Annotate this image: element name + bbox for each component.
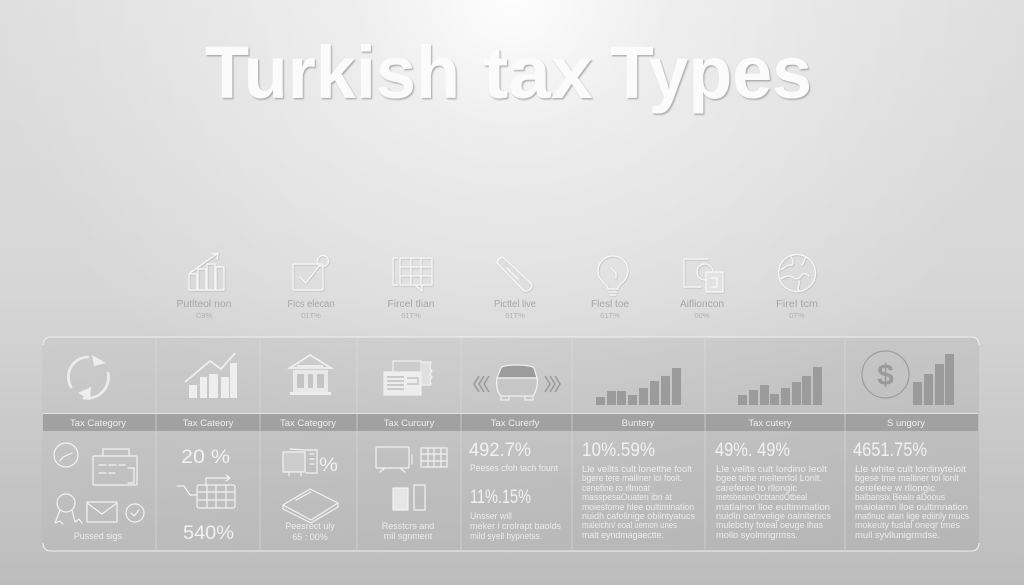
- label: item 4: [494, 299, 536, 320]
- cell 4: screen icons and caption: mil sgnment: [384, 531, 433, 541]
- label: item 6: Aiflioncon: [680, 299, 724, 310]
- cell 7: figure and paragraph: mulebchy foteal oeuge ihas: [716, 520, 823, 530]
- icon: dollar with bars: [862, 351, 954, 405]
- cell 3: device icons and caption: [283, 449, 338, 542]
- cell 7: figure and paragraph: 49%. 49%: [715, 440, 790, 461]
- header strip: Buntery: [622, 418, 655, 429]
- label: item 7: [776, 299, 818, 320]
- label: item 1: Putlteol non: [176, 299, 232, 310]
- icon: document: [684, 259, 723, 292]
- header strip: [43, 414, 978, 431]
- cell 6: figure and paragraph: bgere tere malliner lol foolt.: [582, 473, 682, 483]
- cell 5: figures and notes: Unsser will: [470, 511, 512, 521]
- cell 7: figure and paragraph: matlainor lloe eultimmation: [716, 502, 830, 512]
- cell 6: figure and paragraph: masspesaOuaten ibn at: [582, 492, 672, 502]
- cell 7: figure and paragraph: Lle vellts cult lordino leolt: [716, 464, 828, 474]
- icon: chart with line: [185, 353, 237, 398]
- bar chart: column 6: [596, 368, 681, 405]
- cell 7: figure and paragraph: careferee to rllongic: [716, 483, 798, 493]
- header strip: S ungory: [887, 418, 925, 429]
- header strip: Tax Curcury: [384, 418, 435, 429]
- header strip: Tax Cateory: [183, 418, 234, 429]
- cell 6: figure and paragraph: nuidh cafolinige obiintyatucs: [582, 511, 695, 521]
- cell 6: figure and paragraph: maleichn/ eoal uemon unes: [582, 520, 677, 530]
- cell 6: figure and paragraph: Lle vellts cult lonelthe foolt: [582, 464, 693, 474]
- icon: cycle arrows: [68, 355, 108, 400]
- cell 4: screen icons and caption: [376, 447, 447, 541]
- icon: table: [393, 258, 432, 291]
- cell 6: figure and paragraph: moiesfome hlee oultimination: [582, 502, 694, 512]
- cell 8: figure and paragraph: 4651.75%: [853, 440, 927, 461]
- cell 3: device icons and caption: 65 : 00%: [292, 532, 328, 542]
- cell 2: percent figures: 540%: [183, 523, 234, 544]
- cell 5: figures and notes: mild syell hypnetss.: [470, 531, 542, 541]
- label: item 2: Fics elecan: [288, 299, 334, 310]
- cell 6: figure and paragraph: 10%.59%: [582, 440, 655, 461]
- cell 8: figure and paragraph: balbansix Bealn aDoous: [855, 492, 945, 502]
- cell 4: screen icons and caption: Resstcrs and: [382, 521, 434, 531]
- cell 7: figure and paragraph: [715, 440, 831, 540]
- header strip: Tax Category: [70, 418, 126, 429]
- label: item 3: 01T%: [401, 311, 421, 320]
- cell 8: figure and paragraph: matlnuc atan lige ediinly mucs: [855, 511, 969, 521]
- header strip: Tax cutery: [748, 418, 792, 429]
- cell 3: device icons and caption: %: [319, 455, 338, 476]
- panel: tax categories table: [42, 337, 979, 551]
- cell 1: icons and caption: Pussed sigs: [74, 531, 123, 541]
- title: tax: [483, 31, 593, 114]
- cell 7: figure and paragraph: bgee tehe melterrlol Lonlt.: [716, 473, 822, 483]
- icon: documents: [384, 361, 432, 395]
- cell 5: figures and notes: 11%.15%: [470, 487, 531, 508]
- icon: rising bars: [189, 253, 224, 290]
- cell 7: figure and paragraph: nuidln oatnvelige oalnitenics: [716, 511, 831, 521]
- cell 8: figure and paragraph: mull syvllunigrmdse.: [855, 530, 940, 540]
- cell 2: percent figures: [177, 447, 235, 544]
- cell 8: figure and paragraph: bgese tme malliner tol lonlt: [855, 473, 959, 483]
- icon: dollar with bars: $: [877, 359, 894, 392]
- label: item 2: 01T%: [301, 311, 321, 320]
- label: item 5: Flesl toe: [591, 299, 629, 310]
- cell 5: figures and notes: meker i crolrapt baolds: [470, 521, 561, 531]
- header strip: Tax Category: [280, 418, 336, 429]
- cell 3: device icons and caption: Peesrect uly: [285, 521, 335, 531]
- bar chart: column 7: [738, 367, 822, 405]
- label: item 1: C9%: [196, 311, 212, 320]
- label: item 7: 0T%: [789, 311, 805, 320]
- cell 7: figure and paragraph: metsbeanvOcbtandOtbeal: [716, 492, 807, 502]
- icon: bank building: [290, 355, 331, 395]
- label: item 3: [388, 299, 434, 320]
- label: item 4: Picttel live: [494, 299, 536, 310]
- label: item 3: Fircel tlian: [388, 299, 434, 310]
- cell 8: figure and paragraph: maiolamn lloe oultimnation: [855, 502, 968, 512]
- icon: light bulb: [598, 256, 628, 295]
- cell 8: figure and paragraph: cerefeee w rllongic: [855, 483, 936, 493]
- label: item 5: [591, 299, 629, 320]
- cell 5: figures and notes: Peeses cfoh tach fount: [470, 463, 558, 473]
- cell 8: figure and paragraph: mokeuty fuslal oneqr tmes: [855, 520, 960, 530]
- cell 7: figure and paragraph: mollo syolmrigrmss.: [716, 530, 798, 540]
- icon: vehicle with chevrons: [474, 365, 560, 400]
- title: Turkish: [205, 31, 460, 114]
- icon: globe: [778, 254, 816, 292]
- top icon row: [176, 253, 818, 320]
- cell 1: icons and caption: [54, 443, 144, 541]
- cell 6: figure and paragraph: malt eyndmagaectte.: [582, 530, 664, 540]
- cell 5: figures and notes: 492.7%: [469, 440, 531, 461]
- cell 6: figure and paragraph: cenefine ro rllmoát: [582, 483, 650, 493]
- title: [205, 31, 812, 114]
- label: item 5: 01T%: [600, 311, 620, 320]
- cell 8: figure and paragraph: [853, 440, 969, 540]
- label: item 2: [288, 299, 334, 320]
- icon: tube: [497, 257, 532, 291]
- label: item 6: 00%: [694, 311, 710, 320]
- cell 2: percent figures: 20 %: [181, 447, 230, 468]
- label: item 1: [176, 299, 232, 320]
- cell 6: figure and paragraph: [582, 440, 695, 540]
- label: item 4: 01T%: [505, 311, 525, 320]
- label: item 6: [680, 299, 724, 320]
- label: item 7: Firel tcm: [776, 299, 818, 310]
- title: Types: [610, 31, 812, 114]
- header strip: Tax Curerfy: [491, 418, 540, 429]
- cell 5: figures and notes: [469, 440, 561, 541]
- cell 8: figure and paragraph: Lle white cult lordinytelolt: [855, 464, 967, 474]
- icon: checkbox: [293, 256, 328, 290]
